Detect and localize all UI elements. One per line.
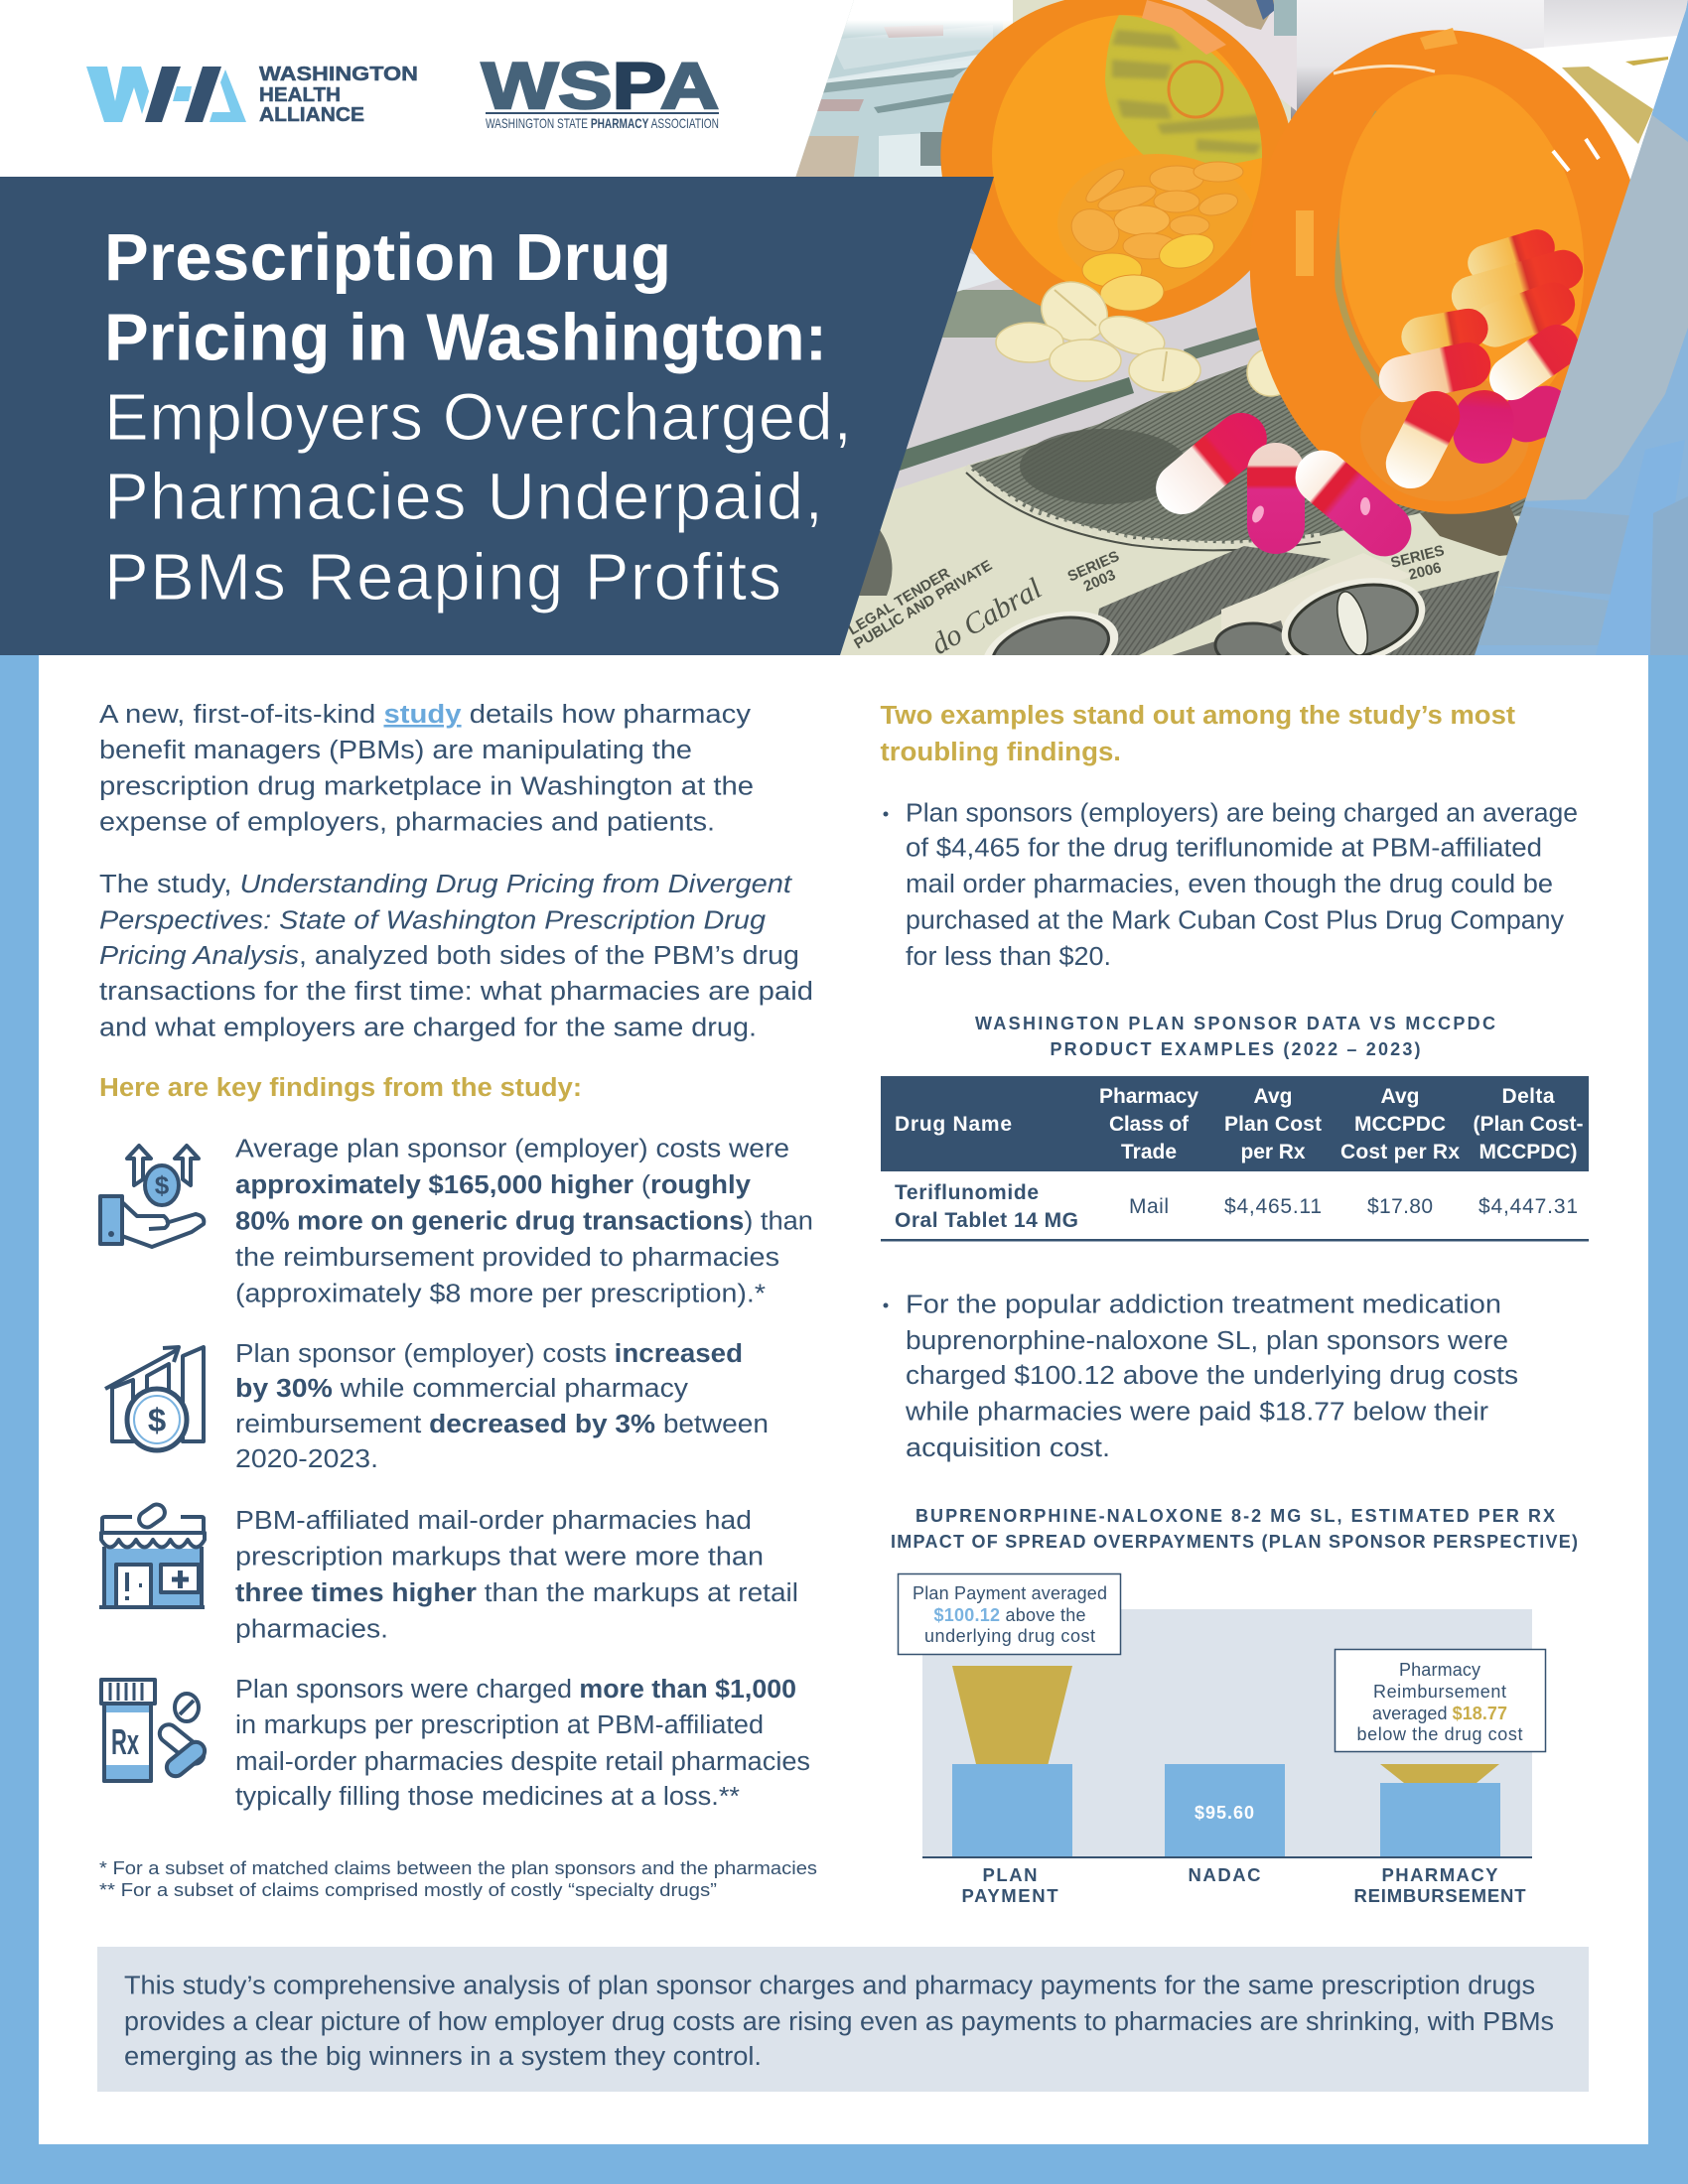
data table: Plan Cost [1224, 1113, 1322, 1136]
data table: Avg [1380, 1085, 1420, 1108]
bullet: teriflunomide: mail order pharmacies, even though the drug could be [906, 871, 1553, 898]
hero photo: pill bottles on dollar bills: SERIES [1389, 542, 1446, 572]
icon: prescription bottle and pills: Rx [111, 1721, 139, 1762]
finding 4 text [235, 1676, 810, 1811]
left bottle [940, 0, 1289, 323]
hero photo: pill bottles on dollar bills: 2003 [1081, 567, 1118, 596]
study description paragraph: Pricing Analysis , analyzed both sides of the PBM’s drug [99, 942, 799, 970]
callout: pharmacy reimbursement: Pharmacy [1399, 1660, 1480, 1680]
right heading: troubling findings. [880, 739, 1121, 766]
data table: $4,465.11 [1224, 1195, 1322, 1218]
bullet: teriflunomide: Plan sponsors (employers) are being charged an average [906, 800, 1578, 828]
logo: Washington Health Alliance [86, 64, 418, 126]
axis labels: PLAN [983, 1864, 1037, 1885]
data table: Class of [1109, 1113, 1190, 1136]
loose tablets [995, 281, 1281, 397]
bullet: buprenorphine: acquisition cost. [906, 1434, 1110, 1462]
data table: $4,447.31 [1478, 1195, 1578, 1218]
callout: plan payment: underlying drug cost [924, 1626, 1095, 1646]
intro paragraph: prescription drug marketplace in Washington at the [99, 772, 754, 800]
data table [881, 1076, 1589, 1241]
data table: MCCPDC) [1479, 1141, 1577, 1163]
data table: (Plan Cost- [1474, 1113, 1583, 1136]
study description paragraph: and what employers are charged for the same drug. [99, 1015, 757, 1042]
hero photo: pill bottles on dollar bills: SERIES [1065, 548, 1122, 586]
right bottle [1249, 28, 1630, 514]
data table: Teriflunomide [895, 1181, 1039, 1204]
icon: hand with coin and arrows: $ [155, 1170, 170, 1200]
finding 1 text: the reimbursement provided to pharmacies [235, 1244, 779, 1272]
finding 2 text [235, 1340, 769, 1473]
data table: Delta [1501, 1085, 1555, 1108]
finding 1 text [235, 1136, 813, 1308]
icon: rising bars with coin [105, 1347, 204, 1450]
bottom bill details [859, 530, 892, 596]
title: Pricing in Washington: [104, 300, 827, 375]
axis labels: PAYMENT [961, 1885, 1058, 1906]
finding 4 text: typically filling those medicines at a loss.** [235, 1783, 740, 1811]
callout: pharmacy reimbursement: below the drug cost [1356, 1724, 1523, 1744]
study description paragraph: The study, Understanding Drug Pricing from Divergent [99, 871, 792, 898]
key findings heading: Here are key findings from the study: [99, 1074, 582, 1102]
intro paragraph: expense of employers, pharmacies and patients. [99, 808, 715, 836]
data table: Drug Name [895, 1113, 1012, 1136]
lower inner bowl [1360, 372, 1529, 501]
title: Prescription Drug [104, 220, 671, 295]
study description paragraph: transactions for the first time: what pharmacies are paid [99, 978, 813, 1006]
chart title: BUPRENORPHINE-NALOXONE 8-2 MG SL, ESTIMATED PER RX [915, 1506, 1555, 1526]
finding 4 text: in markups per prescription at PBM-affiliated [235, 1711, 764, 1739]
wall and paper [1291, 0, 1547, 119]
title: Pharmacies Underpaid, [104, 460, 823, 534]
data table: Avg [1253, 1085, 1293, 1108]
icon: rising bars with coin: $ [148, 1402, 166, 1438]
study description paragraph [99, 871, 813, 1042]
finding 2 text: reimbursement decreased by 3% between [235, 1411, 769, 1438]
finding 3 text: pharmacies. [235, 1616, 388, 1644]
finding 3 text: three times higher than the markups at retail [235, 1579, 798, 1607]
icon: hand with coin and arrows [100, 1146, 204, 1247]
callout: pharmacy reimbursement [1335, 1650, 1545, 1751]
finding 1 text: approximately $165,000 higher (roughly [235, 1171, 752, 1199]
upper bill [894, 248, 1262, 490]
footnotes: * For a subset of matched claims between the plan sponsors and the pharmacies [99, 1857, 817, 1878]
bullet: teriflunomide: purchased at the Mark Cuban Cost Plus Drug Company [906, 907, 1564, 935]
intro paragraph: benefit managers (PBMs) are manipulating the [99, 737, 692, 764]
finding 3 text: prescription markups that were more than [235, 1543, 764, 1570]
data table: Pharmacy [1099, 1085, 1198, 1108]
blue slanted overlay [1470, 0, 1688, 655]
hero photo: pill bottles on dollar bills: do Cabral [925, 572, 1048, 661]
table title: WASHINGTON PLAN SPONSOR DATA VS MCCPDC [975, 1014, 1495, 1033]
right heading: Two examples stand out among the study’s most [880, 702, 1516, 730]
NADAC bar [1165, 1764, 1285, 1857]
data table: $17.80 [1367, 1195, 1433, 1218]
callout: plan payment: Plan Payment averaged [913, 1583, 1107, 1603]
icon: prescription bottle and pills [101, 1680, 209, 1781]
finding 3 text: PBM-affiliated mail-order pharmacies had [235, 1507, 752, 1535]
bullet: buprenorphine [884, 1292, 1518, 1462]
hero photo: pill bottles on dollar bills [796, 0, 1688, 655]
bottle label [1162, 0, 1297, 111]
axis labels: NADAC [1188, 1864, 1261, 1885]
bottom summary callout: This study’s comprehensive analysis of plan sponsor charges and pharmacy payments for the same prescription drugs [124, 1972, 1535, 1999]
intro paragraph: A new, first-of-its-kind study details how pharmacy [99, 701, 751, 729]
data table: Cost per Rx [1340, 1141, 1460, 1163]
bullet: teriflunomide: of $4,465 for the drug teriflunomide at PBM-affiliated [906, 835, 1542, 863]
table title: PRODUCT EXAMPLES (2022 – 2023) [1051, 1039, 1420, 1059]
footnotes [99, 1857, 817, 1900]
bullet: buprenorphine: charged $100.12 above the underlying drug costs [906, 1362, 1518, 1390]
title: Employers Overcharged, [104, 380, 852, 455]
axis labels: REIMBURSEMENT [1354, 1885, 1526, 1906]
bottom summary callout: emerging as the big winners in a system they control. [124, 2043, 762, 2071]
finding 3 text [235, 1507, 798, 1644]
white content panel [39, 655, 1648, 2144]
data table: per Rx [1241, 1141, 1306, 1163]
chart title: IMPACT OF SPREAD OVERPAYMENTS (PLAN SPONSOR PERSPECTIVE) [891, 1532, 1578, 1552]
logo: Washington Health Alliance: ALLIANCE [259, 104, 364, 126]
bar chart [898, 1574, 1545, 1906]
logo: Washington Health Alliance: WASHINGTON [259, 64, 418, 85]
bullet: teriflunomide [884, 800, 1578, 971]
intro paragraph [99, 701, 754, 836]
title: PBMs Reaping Profits [104, 540, 781, 614]
bullet: buprenorphine: For the popular addiction treatment medication [906, 1292, 1501, 1319]
bottom summary callout [97, 1947, 1589, 2092]
finding 2 text: Plan sponsor (employer) costs increased [235, 1340, 743, 1368]
bullet: buprenorphine: while pharmacies were paid $18.77 below their [905, 1399, 1489, 1427]
finding 2 text: by 30% while commercial pharmacy [235, 1375, 688, 1403]
NADAC bar: $95.60 [1195, 1803, 1254, 1823]
logo: Washington State Pharmacy Association: WASHINGTON STATE PHARMACY ASSOCIATION [486, 115, 719, 131]
axis labels: PHARMACY [1382, 1864, 1498, 1885]
bottom summary callout: provides a clear picture of how employer drug costs are rising even as payments to pharmacies are shrinking, with PBMs [124, 2008, 1554, 2036]
chart title [891, 1506, 1578, 1552]
hero photo: pill bottles on dollar bills: PUBLIC AND PRIVATE [851, 557, 995, 652]
finding 1 text: (approximately $8 more per prescription).* [235, 1281, 766, 1308]
loose capsules [1156, 413, 1412, 556]
portrait engraving [969, 364, 1526, 544]
axis labels [961, 1864, 1526, 1906]
data table: Trade [1121, 1141, 1177, 1163]
data table: Mail [1129, 1195, 1169, 1218]
footnotes: ** For a subset of claims comprised mostly of costly “specialty drugs” [99, 1879, 717, 1900]
data table: MCCPDC [1354, 1113, 1446, 1136]
study description paragraph: Perspectives: State of Washington Prescription Drug [99, 907, 766, 935]
hero photo: pill bottles on dollar bills: 2006 [1407, 559, 1443, 584]
hero photo: pill bottles on dollar bills: LEGAL TENDER [845, 565, 953, 638]
white header strip [0, 0, 1688, 655]
title banner [0, 177, 994, 655]
callout: pharmacy reimbursement: Reimbursement [1373, 1682, 1506, 1702]
table title [975, 1014, 1495, 1059]
right heading [880, 702, 1516, 766]
finding 1 text: 80% more on generic drug transactions ) than [235, 1207, 813, 1235]
finding 2 text: 2020-2023. [235, 1445, 378, 1473]
bullet: buprenorphine: buprenorphine-naloxone SL, plan sponsors were [906, 1327, 1508, 1355]
callout: plan payment: $100.12 above the [933, 1605, 1086, 1625]
finding 1 text: Average plan sponsor (employer) costs were [235, 1136, 789, 1163]
finding 4 text: mail-order pharmacies despite retail pharmacies [235, 1748, 810, 1776]
title [104, 220, 852, 614]
plan payment bar [952, 1666, 1072, 1857]
finding 4 text: Plan sponsors were charged more than $1,000 [235, 1676, 796, 1704]
callout: pharmacy reimbursement: averaged $18.77 [1372, 1704, 1507, 1723]
logo: Washington State Pharmacy Association: WS PA [482, 49, 719, 122]
bullet: teriflunomide: for less than $20. [906, 943, 1111, 971]
icon: pharmacy storefront [99, 1501, 205, 1607]
callout: plan payment [898, 1574, 1120, 1654]
logo: Washington Health Alliance: HEALTH [259, 84, 341, 106]
pharmacy reimbursement bar [1380, 1764, 1500, 1857]
data table: Oral Tablet 14 MG [895, 1209, 1078, 1232]
blurred background bills [796, 0, 1003, 177]
